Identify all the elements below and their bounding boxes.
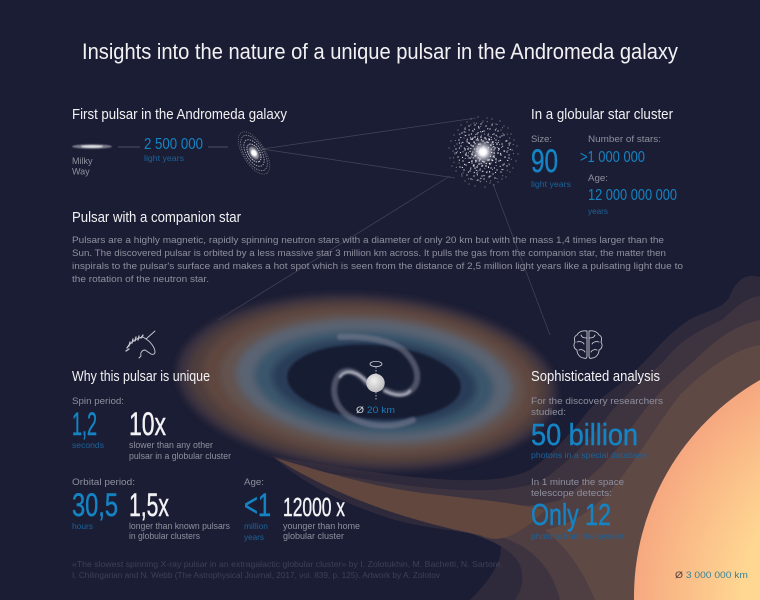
heading: In a globular star cluster	[531, 106, 673, 123]
number of stars	[580, 134, 661, 166]
spiral arms	[334, 337, 417, 426]
photons detected: Only 12	[531, 497, 611, 532]
age: years	[588, 206, 608, 216]
star atmosphere	[272, 276, 760, 600]
age: 12 000 000 000	[588, 187, 677, 204]
heading: Pulsar with a companion star	[72, 209, 241, 226]
photons detected: In 1 minute the space	[531, 477, 624, 487]
spin period: slower than any other	[129, 440, 213, 450]
section: why this pulsar is unique	[72, 368, 360, 542]
section: sophisticated analysis	[531, 368, 664, 541]
heading: Sophisticated analysis	[531, 368, 660, 385]
spin period: 1,2	[72, 406, 97, 442]
age: younger than home	[283, 521, 360, 531]
age: 12000 x	[283, 492, 345, 522]
description paragraph: inspirals to the pulsar's surface and makes a hot spot which is seen from the distance of 2,5 million light years like a pulsating light due to	[72, 261, 683, 271]
Milky Way label: Way	[72, 166, 90, 176]
description paragraph: Sun. The discovered pulsar is orbited by a less massive star 3 million km across. It pulls the gas from the companion star, the matter then	[72, 248, 666, 258]
number of stars: >1 000 000	[580, 149, 645, 166]
orbital period: hours	[72, 521, 93, 531]
orbital period: 30,5	[72, 487, 118, 523]
central gap	[285, 339, 463, 425]
orbital period: Orbital period:	[72, 477, 135, 487]
photons studied: 50 billion	[531, 417, 638, 452]
age	[588, 173, 677, 216]
rotation axis	[370, 361, 382, 401]
description paragraph	[72, 235, 683, 284]
photons studied	[531, 396, 664, 460]
neutron star sphere	[366, 374, 385, 392]
orbital period	[72, 477, 230, 541]
photons studied: studied:	[531, 407, 566, 417]
projection lines	[218, 118, 550, 335]
section: globular star cluster	[531, 106, 677, 216]
icon: Milky Way	[72, 144, 112, 149]
photons detected: photons from the system	[531, 531, 624, 541]
age: globular cluster	[283, 531, 344, 541]
icon: globular cluster	[440, 109, 527, 196]
pulsar diameter label: Ø 20 km	[356, 405, 395, 415]
title: Insights into the nature of a unique pulsar in the Andromeda galaxy	[82, 39, 678, 64]
photons studied: photons in a special database	[531, 450, 647, 460]
orbital period: 1,5x	[129, 487, 169, 523]
spin period: 10x	[129, 406, 166, 442]
icon: unicorn	[126, 331, 155, 358]
size: 90	[531, 143, 558, 179]
photons detected	[531, 477, 624, 541]
size	[531, 134, 571, 189]
age	[244, 477, 360, 542]
distance value: 2 500 000	[144, 136, 203, 153]
age: Age:	[244, 477, 264, 487]
spin period: Spin period:	[72, 396, 124, 406]
heading: Why this pulsar is unique	[72, 368, 210, 385]
orbital period: longer than known pulsars	[129, 521, 230, 531]
spin period: pulsar in a globular cluster	[129, 451, 231, 461]
citation: «The slowest spinning X-ray pulsar in an extragalactic globular cluster» by I. Zolotukhin, M. Bachetti, N. Sartore,	[72, 559, 503, 569]
spin period	[72, 396, 231, 461]
citation	[72, 559, 503, 580]
companion star	[634, 380, 760, 600]
section: pulsar with a companion star	[72, 209, 683, 284]
number of stars: Number of stars:	[588, 134, 661, 144]
Milky Way label: Milky	[72, 156, 92, 166]
icon: Andromeda galaxy	[232, 127, 276, 179]
heading: First pulsar in the Andromeda galaxy	[72, 106, 287, 123]
accretion disk	[171, 282, 563, 483]
icon: brain	[574, 331, 602, 358]
companion star diameter label: Ø 3 000 000 km	[675, 570, 748, 581]
pulsar	[366, 361, 385, 401]
section: first pulsar in Andromeda	[72, 106, 527, 196]
distance connector	[118, 146, 228, 148]
photons studied: For the discovery researchers	[531, 396, 664, 406]
description paragraph: Pulsars are a highly magnetic, rapidly spinning neutron stars with a diameter of only 20 km but with the mass 1,4 times larger than the	[72, 235, 664, 245]
age: Age:	[588, 173, 608, 183]
size: light years	[531, 179, 571, 189]
citation: I. Chilingarian and N. Webb (The Astrophysical Journal, 2017, vol. 839, p. 125). Artwork by A. Zolotov	[72, 570, 441, 580]
size: Size:	[531, 134, 552, 144]
spin period: seconds	[72, 440, 104, 450]
distance unit: light years	[144, 153, 184, 163]
age: <1	[244, 487, 271, 523]
photons detected: telescope detects:	[531, 488, 612, 498]
description paragraph: the rotation of the neutron star.	[72, 274, 209, 284]
orbital period: in globular clusters	[129, 531, 200, 541]
age: years	[244, 532, 264, 542]
age: million	[244, 521, 268, 531]
